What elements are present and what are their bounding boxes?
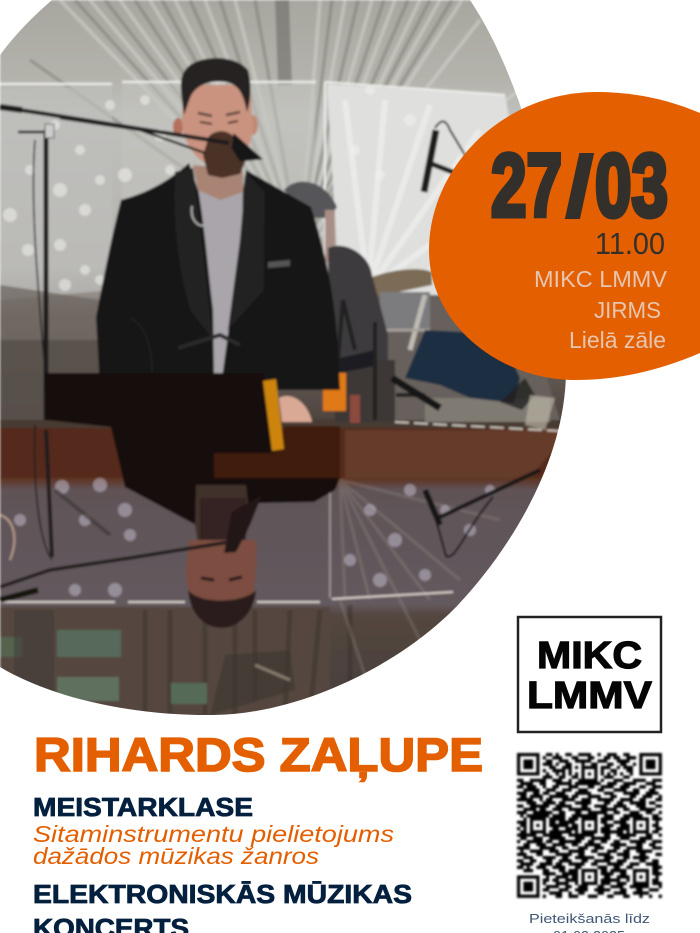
hand (279, 396, 312, 422)
date: 27 (491, 135, 562, 235)
masterclass heading: MEISTARKLASE (33, 792, 253, 822)
logo: MIKC LMMV: MIKC (537, 635, 642, 677)
grey t-shirt (198, 186, 243, 378)
performer name: RIHARDS ZAĻUPE (34, 728, 483, 782)
concert heading (33, 879, 412, 933)
masterclass topic: dažādos mūzikas žanros (33, 843, 320, 869)
neck (193, 165, 243, 200)
right microphone (424, 121, 468, 192)
acrylic drum screens (0, 82, 540, 300)
QR code (517, 753, 662, 898)
black music stand (44, 373, 340, 525)
time: 11.00 (595, 226, 665, 261)
venue line 1: MIKC LMMV (534, 266, 668, 292)
masterclass topic (33, 821, 395, 869)
head and face (173, 58, 258, 178)
logo: MIKC LMMV (518, 617, 661, 732)
reflected lower field (0, 480, 500, 720)
left mic stand and boom (0, 107, 262, 420)
jacket lapels (174, 168, 265, 340)
event details (491, 135, 668, 353)
venue line 2: JIRMS (594, 297, 661, 323)
reflected right microphone (425, 470, 540, 557)
table seen through stand (214, 426, 340, 478)
lower stage band (0, 284, 100, 375)
date: / (566, 140, 593, 234)
venue hall: Lielā zāle (569, 327, 666, 353)
orange stand edge (263, 379, 284, 451)
drummer (284, 182, 388, 370)
concert heading: ELEKTRONISKĀS MŪZIKAS (33, 879, 412, 909)
reflected head (186, 485, 262, 628)
date: 03 (595, 135, 668, 235)
bokeh highlights (3, 85, 416, 291)
photo: musician on stage with reflection (0, 0, 600, 720)
registration note (529, 911, 650, 933)
masterclass topic: Sitaminstrumentu pielietojums (33, 821, 395, 847)
table edge (0, 420, 570, 428)
orange date blob (429, 92, 700, 380)
registration note: Pieteikšanās līdz (529, 911, 650, 926)
keyboard equipment (321, 300, 556, 432)
logo: MIKC LMMV: LMMV (527, 675, 653, 717)
stage light rays (30, 0, 520, 250)
reflected mic stand and boom (0, 425, 229, 600)
reflected bokeh (14, 478, 495, 597)
date (491, 135, 668, 235)
musician jacket (96, 163, 340, 390)
